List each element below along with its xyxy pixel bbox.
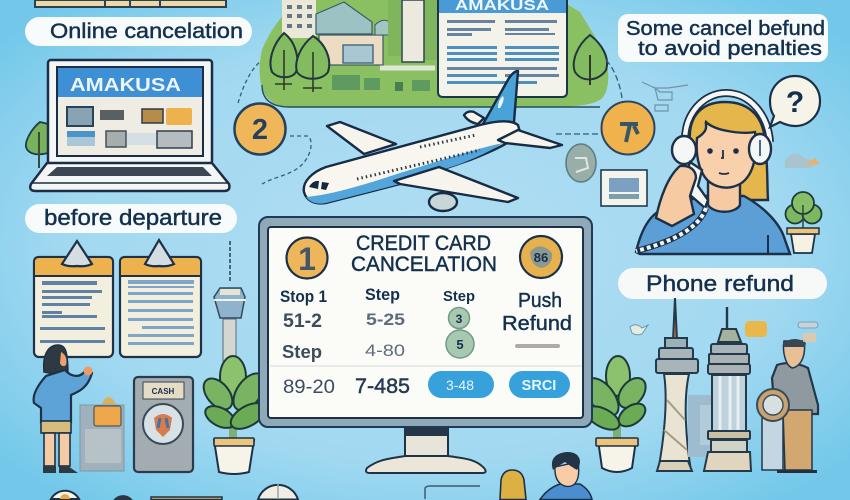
torso bbox=[636, 196, 790, 254]
tower right 1 bbox=[656, 298, 698, 471]
icon: small tree behind laptop bbox=[26, 122, 48, 168]
near wing bbox=[394, 167, 518, 202]
laptop bbox=[30, 60, 229, 191]
clipboard right text lines bbox=[128, 280, 194, 345]
number badge 2 bbox=[234, 104, 286, 154]
passport device bbox=[134, 377, 193, 472]
column push refund: Refund bbox=[502, 313, 572, 335]
call-center woman bbox=[636, 93, 790, 254]
worker with equipment bbox=[757, 322, 818, 473]
tower left bbox=[214, 241, 246, 361]
column step 2: 7-485 bbox=[355, 375, 410, 398]
trees bbox=[270, 33, 607, 92]
yellow circle icon bbox=[602, 102, 654, 154]
blue button 2 bbox=[509, 371, 570, 398]
column push refund: Push bbox=[518, 290, 562, 312]
column step 1: 89-20 bbox=[283, 377, 335, 398]
monitor title: CREDIT CARD bbox=[356, 232, 491, 255]
stabilizer rear bbox=[464, 111, 484, 124]
icon: bird and coin bbox=[630, 321, 767, 337]
column step 1: 51-2 bbox=[283, 311, 322, 332]
plant top right bbox=[786, 192, 822, 253]
cabin window row bbox=[357, 135, 480, 179]
person at board bbox=[34, 345, 92, 473]
background building between towers bbox=[688, 395, 724, 457]
label: refund penalties bbox=[618, 14, 828, 62]
label: refund penalties: to avoid penalties bbox=[638, 38, 822, 60]
stone badge bbox=[566, 144, 596, 182]
plant left bbox=[198, 356, 271, 474]
column step 2 bbox=[355, 286, 410, 398]
bottom-center fragments bbox=[258, 484, 480, 500]
column step 3: Step bbox=[443, 288, 475, 305]
blue button 2: SRCI bbox=[522, 378, 556, 394]
clipboard left bbox=[34, 241, 113, 357]
amakusa document bbox=[438, 0, 567, 97]
headset bbox=[672, 93, 771, 164]
rear stabilizer bbox=[498, 130, 562, 148]
cloud sketch bbox=[785, 153, 820, 168]
cockpit windows bbox=[309, 181, 329, 190]
label: phone refund: Phone refund bbox=[646, 271, 794, 296]
tail fin bbox=[483, 71, 518, 128]
label: refund penalties: Some cancel befund bbox=[626, 18, 825, 40]
plant right of monitor bbox=[579, 356, 651, 472]
building block bbox=[282, 0, 316, 38]
seated man bottom bbox=[540, 452, 592, 500]
label: online cancelation: Online cancelation bbox=[50, 20, 243, 43]
column step 2: 5-25 bbox=[366, 310, 405, 329]
column step 1: Step bbox=[282, 342, 322, 362]
document text lines bbox=[447, 20, 559, 84]
question bubble bbox=[770, 76, 820, 127]
yellow bottle bbox=[500, 470, 526, 500]
neck and face bbox=[708, 178, 740, 212]
column step 1 bbox=[280, 287, 335, 398]
column step 3: 5 bbox=[456, 337, 464, 352]
monitor stand bbox=[366, 428, 486, 473]
facial features bbox=[707, 148, 739, 174]
badge 1 bbox=[286, 238, 328, 278]
top scene: hill and buildings bbox=[260, 0, 608, 107]
clipboard right bbox=[120, 240, 201, 357]
column step 3: 3 bbox=[456, 312, 463, 326]
dashed connector left bbox=[238, 60, 311, 184]
laptop base bbox=[30, 163, 229, 191]
number badge 2: 2 bbox=[252, 114, 268, 146]
shrubs bbox=[332, 75, 430, 91]
small photo card bbox=[601, 170, 647, 206]
question bubble: ? bbox=[786, 86, 804, 119]
laptop screen thumbnails bbox=[67, 107, 192, 148]
fuselage bbox=[304, 121, 520, 203]
tower right 2 bbox=[704, 307, 751, 471]
house bbox=[316, 2, 392, 65]
column step 1: Stop 1 bbox=[280, 287, 327, 306]
column step 3 bbox=[443, 288, 475, 358]
laptop screen header bbox=[58, 68, 202, 97]
passport device: CASH bbox=[152, 387, 175, 396]
badge 1: 1 bbox=[298, 241, 316, 277]
column step 2: 4-80 bbox=[365, 341, 405, 360]
label: before departure: before departure bbox=[44, 205, 222, 230]
laptop screen header: AMAKUSA bbox=[70, 75, 181, 95]
monitor title bbox=[351, 232, 497, 276]
blue button 1 bbox=[428, 371, 494, 398]
badge right bbox=[520, 236, 562, 278]
phone and hand bbox=[636, 162, 768, 253]
column push refund bbox=[502, 290, 572, 348]
airplane bbox=[304, 71, 562, 211]
white column bbox=[388, 0, 437, 62]
bottom-left fragments bbox=[51, 491, 222, 500]
engine bbox=[429, 193, 457, 211]
far wing bbox=[327, 122, 396, 154]
column step 2: Step bbox=[365, 286, 400, 304]
label: before departure bbox=[25, 204, 237, 233]
badge right: 86 bbox=[534, 250, 548, 265]
monitor title: CANCELATION bbox=[351, 253, 497, 276]
icon: papers and wallet bbox=[80, 397, 124, 471]
top-left card strip bbox=[35, 0, 226, 7]
small gadget sketch bbox=[642, 82, 688, 111]
label: phone refund bbox=[618, 268, 827, 299]
clipboard left text lines bbox=[40, 281, 105, 343]
dashed connector right bbox=[556, 60, 622, 134]
monitor bbox=[259, 217, 592, 473]
label: online cancelation bbox=[25, 17, 252, 46]
blue button 1: 3-48 bbox=[446, 377, 474, 393]
hair back bbox=[690, 102, 768, 200]
